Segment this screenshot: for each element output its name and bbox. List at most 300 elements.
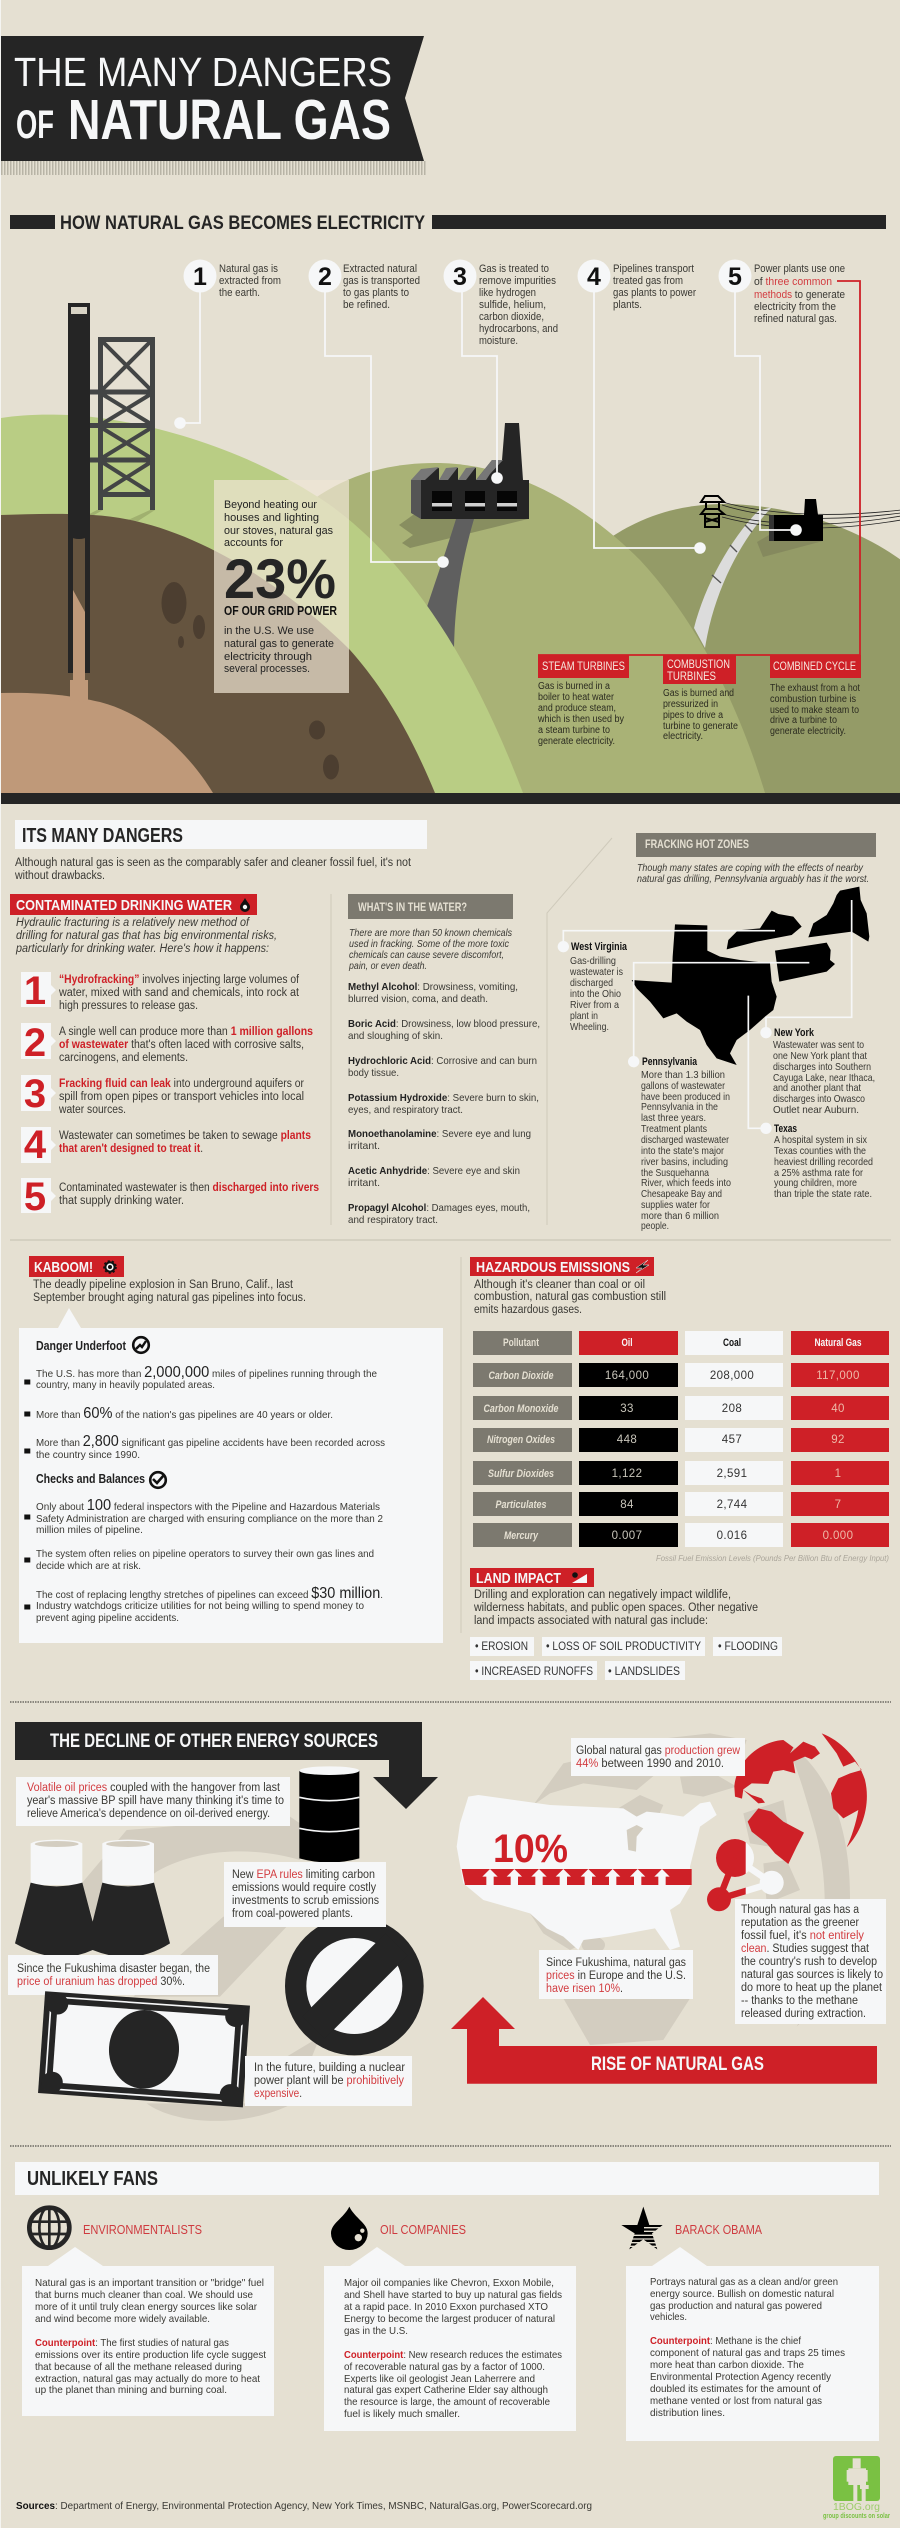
emissions table: 0.000	[823, 1530, 853, 1542]
panel: what's in the water: used in fracking. Some of the more toxic	[349, 938, 510, 950]
panel: oil companies: Experts like oil geologist Jean Laherrere and	[344, 2373, 535, 2385]
panel: fracking hot zones: Though many states are coping with the effects of nearby	[637, 862, 864, 874]
icon: striped star	[621, 2207, 663, 2249]
icon: oil drop	[331, 2207, 368, 2250]
emissions table	[473, 1331, 889, 1547]
emissions table: 117,000	[816, 1370, 860, 1382]
method: combustion turbines: COMBUSTION	[667, 659, 730, 671]
US map with 10 percent: 10%	[493, 1827, 568, 1871]
text: production grew: Global natural gas production grew	[576, 1745, 741, 1757]
emissions table: 0.007	[612, 1530, 642, 1542]
panel: kaboom: More than 2,800 significant gas pipeline accidents have been recorded across	[36, 1433, 385, 1450]
label: Pennsylvania: More than 1.3 billion	[641, 1069, 725, 1081]
label: West Virginia: River from a	[570, 999, 619, 1011]
emissions table: 208,000	[710, 1370, 754, 1382]
emissions table: Coal	[723, 1337, 741, 1349]
panel: hazardous emissions	[470, 1257, 889, 1563]
panel: Barack Obama: vehicles.	[650, 2311, 687, 2323]
panel: kaboom: September brought aging natural gas pipelines into focus.	[33, 1292, 306, 1304]
icon: dollar bill	[38, 1991, 250, 2107]
step 2: 2	[318, 263, 332, 291]
step 4 fracking: Wastewater can sometimes be taken to sewage plants	[59, 1130, 311, 1142]
panel: what's in the water: Methyl Alcohol: Drowsiness, vomiting,	[348, 981, 518, 993]
panel: kaboom	[19, 1256, 443, 1643]
panel: what's in the water: irritant.	[348, 1177, 380, 1189]
emissions table: 457	[722, 1434, 742, 1446]
callout: 23 percent of grid power: Beyond heating our	[224, 499, 317, 511]
method: steam turbines: and produce steam,	[538, 703, 616, 714]
emissions table: Pollutant	[503, 1337, 539, 1349]
label: Pennsylvania: supplies water for	[641, 1199, 710, 1211]
panel: contaminated drinking water: Hydraulic fracturing is a relatively new method of	[16, 917, 251, 929]
text: production grew	[571, 1738, 745, 1776]
icon: water drop	[240, 898, 250, 912]
panel: Barack Obama: gas production and natural gas powered	[650, 2300, 822, 2312]
label: Pennsylvania: Pennsylvania in the	[641, 1101, 718, 1113]
method: steam turbines: STEAM TURBINES	[542, 661, 625, 673]
panel: what's in the water: irritant.	[348, 1140, 380, 1152]
method: combustion turbines: pipes to drive a	[663, 710, 723, 721]
label: Pennsylvania: Treatment plants	[641, 1123, 707, 1135]
panel: kaboom: Safety Administration are charged with ensuring compliance on the more than 2	[36, 1513, 383, 1525]
label: Pennsylvania: discharged wastewater	[641, 1134, 729, 1146]
panel: environmentalists: that burns much cleaner than coal. We should use	[35, 2289, 253, 2301]
panel: Barack Obama: Portrays natural gas as a clean and/or green	[650, 2276, 838, 2288]
label: Pennsylvania: last three years.	[641, 1112, 706, 1124]
callout: 23 percent of grid power: in the U.S. We use	[224, 625, 314, 637]
label: Pennsylvania	[641, 1056, 731, 1232]
label: Pennsylvania: Chesapeake Bay and	[641, 1188, 722, 1200]
panel: kaboom: the country since 1990.	[36, 1449, 140, 1461]
text: greener reputation: released during extraction.	[741, 2008, 866, 2020]
panel: kaboom: The U.S. has more than 2,000,000 miles of pipelines running through the	[36, 1364, 377, 1381]
emissions table: 92	[831, 1434, 845, 1446]
step 3: hydrocarbons, and	[479, 323, 558, 335]
title banner: OF	[16, 103, 54, 147]
step 3 fracking: 3	[24, 1072, 46, 1116]
step 4: plants.	[613, 299, 642, 311]
method: steam turbines	[537, 655, 629, 747]
label: Pennsylvania: people.	[641, 1220, 669, 1232]
label: New York: discharges into Southern	[773, 1061, 871, 1073]
emissions table: Mercury	[504, 1530, 539, 1542]
panel: Barack Obama: Counterpoint: Methane is the chief	[650, 2335, 801, 2347]
heading: its many dangers	[14, 820, 427, 882]
method: steam turbines: Gas is burned in a	[538, 681, 610, 692]
method: combustion turbines: Gas is burned and	[663, 688, 734, 699]
step 2 fracking: carcinogens, and elements.	[59, 1052, 188, 1064]
step 4	[578, 260, 696, 311]
panel: kaboom: KABOOM!	[34, 1259, 93, 1276]
step 4: gas plants to power	[613, 287, 696, 299]
panel: environmentalists: and wind become more widely available.	[35, 2313, 210, 2325]
text: volatile oil prices: year's massive BP spill have many thinking it's time to	[27, 1795, 284, 1807]
hills landscape	[1, 415, 900, 793]
label: West Virginia: West Virginia	[571, 941, 628, 953]
step 2: be refined.	[343, 299, 390, 311]
step 1: Natural gas is	[219, 263, 278, 275]
emissions table: 1,122	[612, 1468, 642, 1480]
label: Pennsylvania: the Susquehanna	[641, 1167, 709, 1179]
label: West Virginia: into the Ohio	[570, 988, 621, 1000]
emissions table: 2,744	[717, 1499, 748, 1511]
step 5: methods to generate	[754, 289, 845, 301]
step 1: extracted from	[219, 275, 281, 287]
method: combustion turbines: pressurized in	[663, 699, 718, 710]
text: uranium: Since the Fukushima disaster began, the	[17, 1963, 210, 1975]
step 2 fracking: 2	[24, 1021, 46, 1065]
callout: 23 percent of grid power: electricity through	[224, 651, 312, 663]
step 5: of three common	[754, 276, 832, 288]
step 2 fracking	[21, 1021, 313, 1065]
panel: environmentalists: Natural gas is an important transition or "bridge" fuel	[35, 2277, 264, 2289]
method: steam turbines: a steam turbine to	[538, 725, 610, 736]
text: uranium: price of uranium has dropped 30%.	[17, 1976, 185, 1988]
panel: what's in the water: Propagyl Alcohol: Damages eyes, mouth,	[348, 1202, 530, 1214]
label: New York: one New York plant that	[773, 1050, 867, 1062]
label: New York: discharges into Owasco	[773, 1093, 865, 1105]
callout: 23 percent of grid power	[214, 480, 349, 693]
panel: oil companies: gas in the U.S.	[344, 2325, 408, 2337]
step 5 fracking: Contaminated wastewater is then discharged into rivers	[59, 1182, 319, 1194]
logo: 1BOG	[823, 2456, 890, 2520]
panel: environmentalists: extraction, natural gas may actually do more to heat	[35, 2373, 260, 2385]
text: nuclear plant expensive: power plant will be prohibitively	[254, 2075, 404, 2087]
label: West Virginia: Wheeling.	[570, 1021, 609, 1033]
label: Pennsylvania: into the state's major	[641, 1145, 724, 1157]
step 2: gas is transported	[343, 275, 420, 287]
panel: contaminated drinking water: drilling for natural gas that has big environmental risks,	[16, 930, 277, 942]
icon: cooling towers	[15, 1840, 170, 1957]
text: nuclear plant expensive	[245, 2056, 412, 2106]
text: greener reputation: natural gas sources is likely to	[741, 1969, 883, 1981]
step 2 fracking: of wastewater that's often laced with corrosive salts,	[59, 1039, 304, 1051]
panel: Barack Obama: distribution lines.	[650, 2407, 725, 2419]
method: steam turbines: which is then used by	[537, 714, 624, 725]
panel: land impact: • LANDSLIDES	[608, 1666, 680, 1678]
panel: Barack Obama: more heat than carbon dioxide. The	[650, 2359, 804, 2371]
step 3: like hydrogen	[479, 287, 536, 299]
step 4 fracking: 4	[24, 1123, 47, 1167]
panel: what's in the water: and respiratory tract.	[348, 1214, 438, 1226]
step 3 fracking: water sources.	[58, 1104, 126, 1116]
sub-heading: checks and balances: Checks and Balances	[36, 1472, 145, 1486]
step 5 fracking: that supply drinking water.	[59, 1195, 184, 1207]
callout: 23 percent of grid power: accounts for	[224, 537, 283, 549]
icon: methane molecule	[707, 1839, 784, 1911]
label: New York: and another plant that	[773, 1082, 861, 1094]
panel: fracking hot zones	[558, 833, 876, 1232]
panel: Barack Obama: methane vented or lost from natural gas	[650, 2395, 822, 2407]
text: production grew: 44% between 1990 and 2010.	[576, 1758, 724, 1770]
panel: contaminated drinking water: particularly for drinking water. Here's how it happens:	[15, 943, 269, 955]
step 4 fracking: that aren't designed to treat it.	[59, 1143, 203, 1155]
label: Pennsylvania: Pennsylvania	[642, 1056, 698, 1068]
step 1 fracking: “Hydrofracking” involves injecting large volumes of	[59, 974, 300, 986]
panel: environmentalists: ENVIRONMENTALISTS	[83, 2222, 202, 2237]
panel: what's in the water: Acetic Anhydride: Severe eye and skin	[348, 1165, 520, 1177]
step 3: Gas is treated to	[479, 263, 549, 275]
step 1 fracking: water, mixed with sand and chemicals, into rock at	[58, 987, 300, 999]
heading: unlikely fans	[15, 2162, 879, 2195]
panel: kaboom: million miles of pipeline.	[36, 1524, 143, 1536]
emissions table: 208	[722, 1403, 742, 1415]
method: combustion turbines: TURBINES	[667, 671, 716, 683]
emissions table: 33	[620, 1403, 634, 1415]
label: Texas: heaviest drilling recorded	[774, 1156, 873, 1168]
sub-heading: danger underfoot: Danger Underfoot	[36, 1339, 127, 1353]
panel: oil companies: Energy to become the largest producer of natural	[344, 2313, 555, 2325]
panel: oil companies: Counterpoint: New research reduces the estimates	[344, 2349, 562, 2361]
panel: oil companies: of recoverable natural gas by a factor of 1000.	[344, 2361, 545, 2373]
emissions table: Oil	[622, 1337, 632, 1349]
callout: 23 percent of grid power: 23%	[224, 547, 336, 610]
text: EPA rules: emissions would require costly	[232, 1882, 376, 1894]
step 2: Extracted natural	[343, 263, 417, 275]
panel: hazardous emissions: combustion, natural gas combustion still	[474, 1291, 666, 1303]
text: greener reputation: Though natural gas has a	[741, 1904, 860, 1916]
panel: Barack Obama: component of natural gas and traps 25 times	[650, 2347, 845, 2359]
method: steam turbines: boiler to heat water	[538, 692, 615, 703]
icon: gear	[104, 1261, 116, 1273]
map of fracking states	[558, 887, 869, 1134]
panel: Barack Obama: Environmental Protection Agency recently	[650, 2371, 832, 2383]
text: volatile oil prices: Volatile oil prices coupled with the hangover from last	[27, 1782, 281, 1794]
section heading: how natural gas becomes electricity: HOW NATURAL GAS BECOMES ELECTRICITY	[60, 212, 425, 234]
text: greener reputation: fossil fuel, it's not entirely	[741, 1930, 864, 1942]
factory icon	[411, 423, 529, 519]
step 3: carbon dioxide,	[479, 311, 544, 323]
step 5 fracking: 5	[24, 1175, 46, 1219]
icon: land	[572, 1572, 587, 1583]
panel: oil companies: fuel is likely much smaller.	[344, 2408, 460, 2420]
panel: what's in the water: blurred vision, coma, and death.	[348, 993, 488, 1005]
method: combined cycle: generate electricity.	[770, 726, 846, 737]
emissions table: 40	[831, 1403, 845, 1415]
text: Fukushima prices: have risen 10%.	[546, 1983, 623, 1995]
label: New York: Wastewater was sent to	[773, 1039, 864, 1051]
label: New York: New York	[774, 1027, 815, 1039]
title banner: THE MANY DANGERS	[14, 49, 392, 95]
text: greener reputation: reputation as the greener	[741, 1917, 859, 1929]
panel: oil companies: Major oil companies like Chevron, Exxon Mobile,	[344, 2277, 554, 2289]
panel: what's in the water: chemicals can cause severe discomfort,	[349, 949, 504, 961]
step 4 fracking	[21, 1123, 311, 1167]
text: greener reputation: clean. Studies suggest that	[741, 1943, 870, 1955]
panel: environmentalists: more of it until truly clean energy sources like solar	[35, 2301, 257, 2313]
step 1: 1	[193, 263, 207, 291]
label: Texas	[774, 1123, 873, 1200]
text: EPA rules: from coal-powered plants.	[232, 1908, 353, 1920]
emissions table: 164,000	[605, 1370, 649, 1382]
panel: oil companies: and Shell have started to buy up natural gas fields	[344, 2289, 562, 2301]
small power plant icon	[757, 499, 823, 557]
panel: oil companies: natural gas expert Catherine Elder say although	[344, 2384, 548, 2396]
logo: 1BOG: 1BOG.org	[833, 2502, 880, 2513]
emissions table: Particulates	[496, 1499, 546, 1511]
label: Pennsylvania: River, which feeds into	[641, 1177, 731, 1189]
method: combustion turbines: electricity.	[663, 731, 703, 742]
panel: land impact: land impacts associated with natural gas include:	[474, 1615, 708, 1627]
panel: land impact: • LOSS OF SOIL PRODUCTIVITY	[546, 1641, 701, 1653]
step 4: 4	[587, 263, 601, 291]
sources: Sources: Department of Energy, Environmental Protection Agency, New York Times, MSNBC, NaturalGas.org, PowerScorecard.org	[16, 2500, 592, 2512]
method: combined cycle: drive a turbine to	[770, 715, 837, 726]
emissions table: Carbon Dioxide	[488, 1370, 554, 1382]
emissions table: 84	[620, 1499, 634, 1511]
step 1: the earth.	[219, 287, 260, 299]
panel: what's in the water: and sloughing of skin.	[348, 1030, 443, 1042]
panel: what's in the water	[348, 894, 540, 1226]
step 5 fracking	[21, 1175, 319, 1219]
step 2: to gas plants to	[343, 287, 409, 299]
emissions table: Sulfur Dioxides	[488, 1468, 554, 1480]
label: New York: Outlet near Auburn.	[773, 1104, 859, 1116]
text: nuclear plant expensive: In the future, building a nuclear	[254, 2062, 405, 2074]
gas well and derrick	[68, 303, 155, 702]
emissions table: Natural Gas	[814, 1337, 862, 1349]
panel: what's in the water: Potassium Hydroxide: Severe burn to skin,	[348, 1092, 539, 1104]
panel: kaboom: Industry watchdogs criticize utilities for not being willing to spend money to	[36, 1600, 364, 1612]
emissions table: 448	[617, 1434, 637, 1446]
text: Fukushima prices: prices in Europe and the U.S.	[546, 1970, 686, 1982]
panel: kaboom: decide which are at risk.	[36, 1560, 141, 1572]
step 5	[718, 260, 845, 325]
step connector lines	[174, 290, 802, 568]
label: West Virginia: Gas-drilling	[570, 955, 616, 967]
method: combined cycle: combustion turbine is	[770, 694, 856, 705]
section heading: how natural gas becomes electricity	[10, 212, 886, 234]
step 4: Pipelines transport	[613, 263, 694, 275]
text: EPA rules: investments to scrub emissions	[232, 1895, 379, 1907]
panel: kaboom: Only about 100 federal inspectors with the Pipeline and Hazardous Materials	[36, 1497, 380, 1514]
label: West Virginia: wastewater is	[569, 966, 623, 978]
method: steam turbines: generate electricity.	[538, 736, 615, 747]
text: greener reputation	[735, 1899, 886, 2024]
label: Texas: a 25% asthma rate for	[774, 1167, 863, 1179]
icon: lightning bolt	[636, 1260, 649, 1273]
panel: hazardous emissions: emits hazardous gases.	[474, 1304, 582, 1316]
label: Texas: Texas counties with the	[774, 1145, 866, 1157]
label: West Virginia: plant in	[570, 1010, 598, 1022]
emissions table: Carbon Monoxide	[484, 1403, 558, 1415]
label: New York	[773, 1027, 875, 1116]
step 3 fracking: spill from open pipes or transport vehicles into local	[59, 1091, 304, 1103]
icon: red globe	[734, 1733, 867, 1864]
background swoosh decline	[82, 1817, 320, 2121]
emissions table: 0.016	[717, 1530, 747, 1542]
panel: environmentalists	[22, 2207, 274, 2416]
step 2 fracking: A single well can produce more than 1 million gallons	[59, 1026, 313, 1038]
red connector to methods	[538, 281, 860, 655]
step 5: Power plants use one	[754, 263, 845, 275]
text: uranium	[8, 1955, 218, 1995]
emissions table: 7	[835, 1499, 841, 1511]
heading arrow: the decline of other energy sources: THE DECLINE OF OTHER ENERGY SOURCES	[50, 1730, 378, 1752]
emissions table: Nitrogen Oxides	[487, 1434, 555, 1446]
step 5: electricity from the	[754, 301, 836, 313]
method: combined cycle: COMBINED CYCLE	[773, 661, 856, 673]
heading arrow: rise of natural gas: RISE OF NATURAL GAS	[591, 2053, 764, 2075]
step 3: sulfide, helium,	[479, 299, 546, 311]
panel: land impact	[470, 1568, 782, 1680]
heading arrow: the decline of other energy sources	[15, 1722, 438, 1809]
icon: globe grid	[29, 2207, 69, 2249]
label: Pennsylvania: more than 6 million	[641, 1210, 719, 1222]
panel: what's in the water: Boric Acid: Drowsiness, low blood pressure,	[348, 1018, 540, 1030]
text: greener reputation: -- thanks to the methane	[741, 1995, 858, 2007]
panel: fracking hot zones: FRACKING HOT ZONES	[645, 839, 749, 851]
heading: its many dangers: Although natural gas is seen as the comparably safer and cleaner fossil fuel, it's not	[15, 857, 412, 869]
panel: kaboom: country, many in heavily populated areas.	[36, 1379, 215, 1391]
step 3 fracking: Fracking fluid can leak into underground aquifers or	[59, 1078, 304, 1090]
panel: land impact: • FLOODING	[718, 1641, 778, 1653]
method: combined cycle	[770, 655, 861, 737]
callout: 23 percent of grid power: our stoves, natural gas	[224, 525, 333, 537]
step 5: 5	[728, 263, 742, 291]
panel: what's in the water: Monoethanolamine: Severe eye and lung	[348, 1128, 531, 1140]
text: greener reputation: the country's rush to develop	[741, 1956, 877, 1968]
heading arrow: rise of natural gas	[451, 1997, 877, 2084]
panel: land impact: Drilling and exploration can negatively impact wildlife,	[474, 1589, 731, 1601]
step 3: moisture.	[479, 335, 518, 347]
label: Texas: than triple the state rate.	[774, 1188, 872, 1200]
text: Fukushima prices: Since Fukushima, natural gas	[546, 1957, 686, 1969]
step 3: 3	[453, 263, 467, 291]
heading: unlikely fans: UNLIKELY FANS	[27, 2167, 158, 2190]
method: combined cycle: used to make steam to	[770, 705, 859, 716]
text: EPA rules	[224, 1862, 386, 1927]
panel: land impact: • EROSION	[475, 1641, 528, 1653]
title banner: NATURAL GAS	[68, 88, 391, 152]
heading: its many dangers: without drawbacks.	[14, 870, 105, 882]
background grey globe	[530, 1733, 850, 2045]
step 2	[308, 260, 420, 311]
panel: land impact: wilderness habitats, and public open spaces. Other negative	[473, 1602, 758, 1614]
panel: what's in the water: There are more than 50 known chemicals	[349, 927, 513, 939]
label: Texas: young children, more	[774, 1177, 857, 1189]
panel: what's in the water: Hydrochloric Acid: Corrosive and can burn	[348, 1055, 537, 1067]
panel: contaminated drinking water	[10, 894, 319, 1219]
text: nuclear plant expensive: expensive.	[254, 2088, 302, 2100]
panel: hazardous emissions: HAZARDOUS EMISSIONS	[476, 1259, 630, 1276]
panel: environmentalists: Counterpoint: The first studies of natural gas	[35, 2337, 229, 2349]
panel: what's in the water: pain, or even death.	[348, 960, 427, 972]
panel: oil companies: at a rapid pace. In 2010 Exxon purchased XTO	[344, 2301, 548, 2313]
label: New York: Cayuga Lake, near Ithaca,	[773, 1072, 875, 1084]
panel: oil companies: OIL COMPANIES	[380, 2222, 466, 2237]
panel: oil companies	[324, 2207, 576, 2431]
panel: what's in the water: body tissue.	[348, 1067, 399, 1079]
emissions table: 1	[835, 1468, 841, 1480]
panel: kaboom: The cost of replacing lengthy stretches of pipelines can exceed $30 million.	[36, 1585, 383, 1602]
callout: 23 percent of grid power: OF OUR GRID POWER	[224, 603, 337, 618]
method: combined cycle: The exhaust from a hot	[770, 683, 860, 694]
callout: 23 percent of grid power: several processes.	[224, 663, 310, 675]
panel: kaboom: The system often relies on pipeline operators to survey their own gas lines and	[36, 1548, 374, 1560]
text: volatile oil prices: relieve America's dependence on oil-derived energy.	[27, 1808, 270, 1820]
step 4: treated gas from	[613, 275, 683, 287]
text: greener reputation: do more to heat up the planet	[741, 1982, 883, 1994]
step 1 fracking: high pressures to release gas.	[59, 1000, 198, 1012]
method: combustion turbines	[663, 655, 738, 742]
text: Fukushima prices	[539, 1950, 693, 1999]
panel: Barack Obama: energy source. Bullish on domestic natural	[650, 2288, 834, 2300]
panel: land impact: • INCREASED RUNOFFS	[475, 1666, 593, 1678]
label: Pennsylvania: river basins, including	[641, 1156, 728, 1168]
label: Texas: A hospital system in six	[774, 1134, 868, 1146]
icon: oil barrel	[299, 1766, 359, 1862]
